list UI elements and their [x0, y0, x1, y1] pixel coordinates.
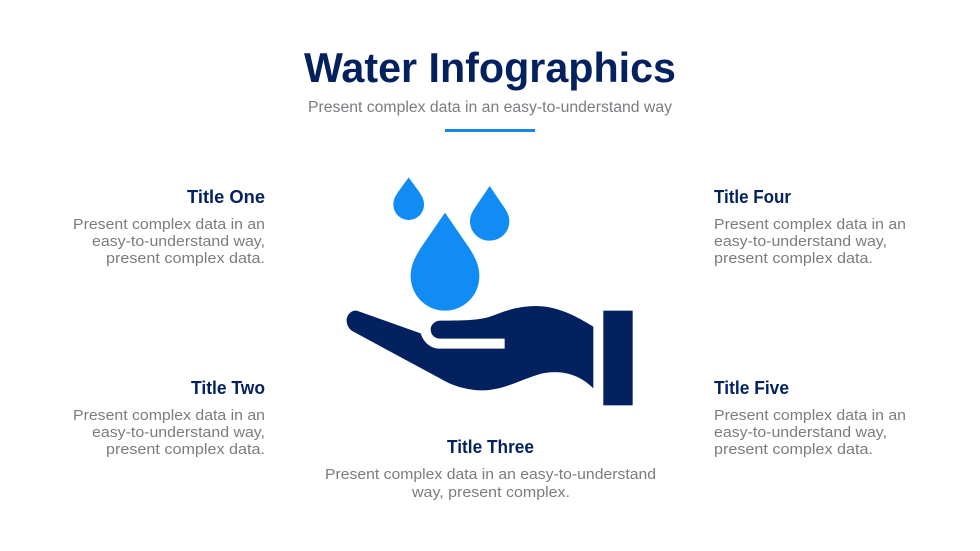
body: title one: present complex data. — [106, 250, 265, 267]
text block: title two — [73, 378, 265, 458]
text block: title five — [714, 378, 906, 458]
text block: title one — [73, 187, 265, 267]
body: title four — [714, 216, 906, 267]
heading: title one: Title One — [187, 187, 265, 207]
body: title five: present complex data. — [714, 441, 873, 458]
text block: title four — [714, 187, 906, 267]
body: title five: easy-to-understand way, — [714, 424, 887, 441]
body: title three: Present complex data in an easy-to-understand — [325, 466, 656, 483]
icon: sleeve cuff — [603, 311, 633, 405]
body: title one: Present complex data in an — [73, 216, 265, 233]
body: title four: present complex data. — [714, 250, 873, 267]
body: title three: way, present complex. — [411, 484, 570, 501]
heading: title five: Title Five — [714, 378, 789, 398]
body: title four: easy-to-understand way, — [714, 233, 887, 250]
body: title one: easy-to-understand way, — [92, 233, 265, 250]
body: title five: Present complex data in an — [714, 407, 906, 424]
title: Water Infographics — [304, 44, 676, 91]
heading: title four: Title Four — [714, 187, 791, 207]
body: title two: Present complex data in an — [73, 407, 265, 424]
body: title two: easy-to-understand way, — [92, 424, 265, 441]
body: title two: present complex data. — [106, 441, 265, 458]
icon: small left drop — [393, 177, 424, 220]
icon: water drops and hand — [347, 177, 633, 405]
icon: open hand — [347, 306, 593, 390]
body: title five — [714, 407, 906, 458]
subtitle: Present complex data in an easy-to-understand way — [308, 99, 672, 116]
body: title three — [325, 466, 656, 501]
body: title two — [73, 407, 265, 458]
icon: large centre drop — [411, 213, 479, 311]
title underline — [445, 129, 535, 132]
text block: title three — [325, 437, 656, 501]
body: title four: Present complex data in an — [714, 216, 906, 233]
body: title one — [73, 216, 265, 267]
icon: right drop — [470, 186, 509, 241]
heading: title two: Title Two — [191, 378, 265, 398]
heading: title three: Title Three — [447, 437, 534, 457]
